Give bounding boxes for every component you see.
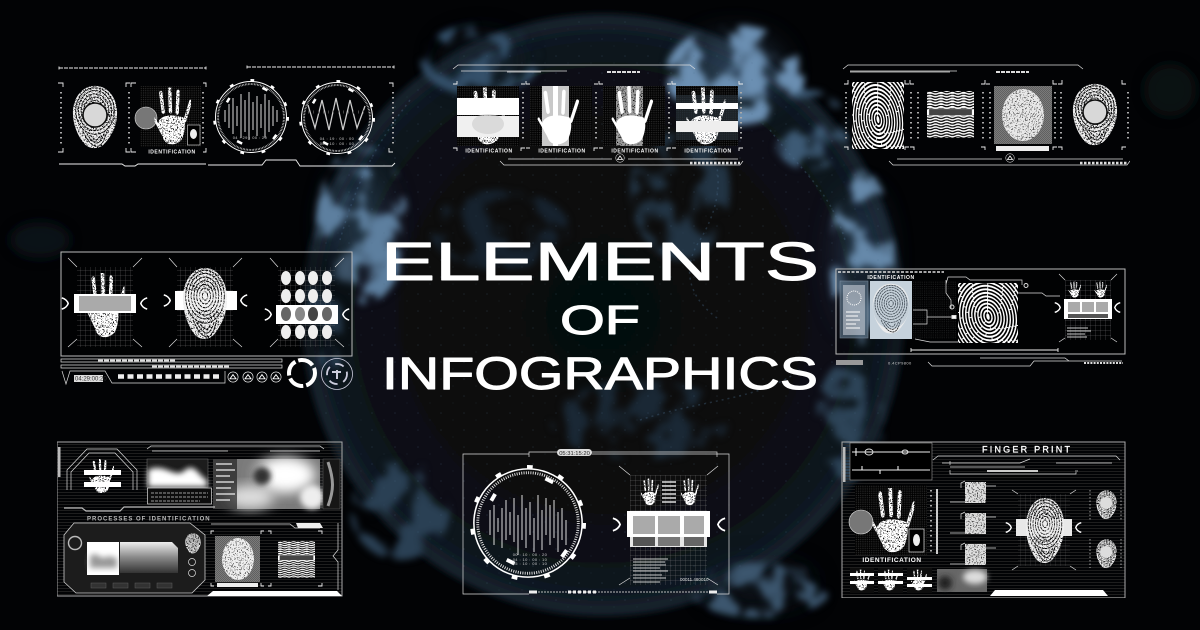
fingerprint scan band — [175, 291, 237, 310]
grey scan disc — [135, 107, 157, 129]
dash strip — [607, 71, 640, 73]
centre list — [662, 482, 676, 502]
title line two: OF — [560, 297, 640, 343]
white bottom tab — [207, 591, 342, 596]
head brackets — [1090, 490, 1121, 568]
timecode readouts: 04 : 29 : 00 : 20 — [233, 135, 268, 140]
palm print — [873, 488, 914, 552]
console ring — [68, 536, 82, 550]
grey fingerprint tile — [215, 536, 260, 587]
palm print — [87, 273, 124, 337]
blurred image two — [213, 457, 324, 509]
timecode readouts: 05 : 10 : 00 : 00 — [320, 141, 355, 146]
right grid — [630, 475, 707, 585]
tile rail — [211, 524, 320, 528]
dial one — [289, 360, 315, 386]
identification labels: IDENTIFICATION — [611, 148, 659, 154]
numeric readout: 00011.480010 — [680, 577, 709, 582]
timecode pill: 05:31:15:20 — [559, 451, 590, 457]
text block — [633, 559, 668, 582]
scan band — [1016, 519, 1072, 536]
identification labels — [465, 148, 732, 154]
top rule lines — [59, 66, 394, 70]
small print box — [188, 125, 200, 145]
waveform dial — [472, 467, 584, 579]
outer frame with scanlines — [57, 442, 342, 596]
perspective lines — [1059, 274, 1117, 342]
identification labels: IDENTIFICATION — [538, 148, 586, 154]
white bottom tab — [990, 590, 1108, 596]
waveform circle two — [300, 81, 374, 155]
white scan band — [627, 511, 710, 547]
finger print heading: FINGER PRINT — [982, 444, 1070, 454]
top frame — [453, 65, 695, 72]
identification label: IDENTIFICATION — [862, 557, 922, 564]
octagon frame — [67, 449, 137, 490]
title line three: INFOGRAPHICS — [382, 348, 818, 399]
data box — [148, 488, 212, 504]
title line one: ELEMENTS — [381, 232, 819, 292]
tick columns — [846, 92, 1128, 142]
bottom readouts — [836, 358, 1123, 366]
hazard stripe — [1080, 162, 1128, 164]
fingertip scan band — [276, 305, 338, 324]
identification label: IDENTIFICATION — [867, 275, 915, 281]
identification labels: IDENTIFICATION — [465, 148, 513, 154]
round emblem — [1006, 154, 1014, 162]
fingerprint head bottom — [1096, 539, 1117, 568]
palm tile two — [530, 86, 592, 146]
corner brackets — [844, 80, 1126, 150]
fingerprint core — [83, 103, 107, 127]
chevrons — [62, 295, 349, 320]
fingertip ovals — [281, 271, 332, 339]
dial two — [322, 358, 352, 390]
noise tile three — [965, 544, 986, 565]
tile brackets and ticks — [211, 531, 322, 586]
bottom readouts: 0.4CP9800 — [888, 360, 912, 366]
tablet console — [64, 523, 205, 593]
vertical slider — [936, 489, 938, 554]
tick column — [930, 490, 932, 552]
card perspective lines — [68, 258, 344, 347]
waveform circle one — [214, 80, 288, 154]
timecode rail — [529, 452, 717, 457]
console small dials — [188, 558, 196, 576]
right card grid — [1065, 280, 1111, 340]
dial readout: 00 : 10 : 00 : 20 — [513, 552, 548, 557]
section rail — [64, 507, 215, 511]
blurred image — [937, 569, 987, 592]
white tab — [296, 523, 323, 528]
perspective lines — [619, 466, 718, 585]
outer frame — [61, 252, 352, 356]
blurred image one — [147, 459, 208, 487]
panel: palm and waveform scanners (top left) — [58, 66, 395, 166]
centre grid — [1018, 494, 1070, 566]
panel: four palm scans (top centre) — [453, 65, 743, 165]
round emblem — [616, 154, 624, 162]
right side meter — [323, 459, 340, 509]
console white image — [87, 542, 119, 575]
timecode readouts: 04 : 19 : 00 : 00 — [320, 136, 355, 141]
round icons — [228, 372, 281, 382]
bottom rule lines — [59, 160, 395, 166]
mini palm tiles — [850, 568, 932, 593]
white side strip — [58, 447, 60, 477]
outer frame with scanlines — [842, 442, 1125, 598]
palm pair — [641, 479, 698, 505]
palm tile one — [457, 86, 519, 146]
connector nodes — [950, 284, 1028, 318]
panel: fingerprint analysis (middle right) — [836, 257, 1125, 376]
palm with bands — [84, 459, 121, 493]
dash strip — [996, 71, 1029, 73]
chevrons — [1055, 303, 1120, 312]
dial readout — [513, 552, 548, 566]
top stripe — [838, 271, 944, 273]
grey scan disc — [849, 510, 873, 534]
grey fingerprint tile — [994, 86, 1052, 151]
header rail — [933, 456, 1120, 474]
fingerprint head — [73, 86, 117, 148]
signal box — [850, 443, 932, 480]
tile connectors — [950, 481, 996, 564]
palm tile three — [603, 86, 665, 146]
fingerprint tile two — [927, 91, 974, 138]
bottom rail — [911, 348, 1058, 352]
white scan band — [1064, 299, 1112, 319]
outer frame — [836, 269, 1125, 354]
panel: circular waveform and palm pair (bottom centre) — [463, 449, 729, 594]
console oval print — [185, 533, 201, 553]
hazard stripe — [690, 162, 740, 164]
connector lines — [913, 277, 1060, 342]
tick columns — [523, 92, 741, 142]
time readout: 04:29:00:20 — [75, 377, 107, 383]
text block — [1067, 328, 1091, 337]
small palm pair — [1069, 282, 1107, 298]
panel: processes of identification (bottom left) — [57, 442, 342, 596]
dark palm grid — [140, 86, 201, 147]
fingerprint core — [1083, 100, 1107, 124]
dial readout: 04 : 10 : 00 : 10 — [513, 557, 548, 562]
waveform bars — [490, 495, 566, 555]
title — [381, 232, 819, 399]
hazard stripe — [118, 374, 220, 379]
corner brackets — [58, 83, 393, 152]
section heading: PROCESSES OF IDENTIFICATION — [87, 516, 211, 522]
noise tile two — [965, 513, 986, 534]
large fingerprint — [935, 257, 1041, 376]
data card — [840, 281, 868, 338]
white side strip — [843, 447, 846, 482]
identification labels: IDENTIFICATION — [684, 148, 732, 154]
card grids — [77, 267, 335, 347]
translucent fingerprint card — [870, 281, 912, 339]
fingerprint head top — [1096, 490, 1117, 519]
timecode readouts — [233, 135, 355, 146]
slider — [987, 470, 1038, 472]
palm tile four — [676, 86, 738, 146]
palm print — [155, 88, 191, 144]
dial readout: 05 : 10 : 00 : 10 — [513, 561, 548, 566]
panel: three scan cards (middle left) — [61, 252, 352, 390]
palm scan band — [74, 294, 136, 313]
top rail — [147, 446, 324, 451]
top frame — [843, 65, 1083, 72]
panel: fingerprint scans (top right) — [832, 53, 1130, 186]
bottom rail — [889, 159, 1130, 165]
bottom rail — [500, 159, 743, 165]
big fingerprint — [1026, 498, 1064, 563]
grid area — [912, 281, 957, 339]
outer frame — [463, 454, 729, 594]
corner brackets — [453, 81, 743, 151]
dark palm grid — [855, 485, 927, 555]
tick columns — [61, 92, 393, 144]
noise tile one — [965, 482, 986, 503]
fingerprint head — [1073, 84, 1117, 145]
fingerprint — [183, 268, 227, 339]
chevrons — [1006, 523, 1081, 532]
chevrons — [613, 518, 725, 531]
console buttons — [91, 583, 172, 588]
time readout — [62, 371, 225, 384]
console gradient panel — [120, 542, 178, 573]
timecode pill — [557, 449, 592, 457]
progress bars — [61, 359, 282, 368]
small print box — [909, 529, 924, 552]
bottom rail — [529, 590, 717, 594]
wavy print tile — [278, 541, 315, 578]
perspective lines — [1012, 490, 1076, 570]
panel: finger print dashboard (bottom right) — [842, 442, 1125, 598]
right notch — [333, 523, 338, 590]
identification label: IDENTIFICATION — [148, 150, 196, 156]
fingerprint tile one — [832, 53, 924, 186]
